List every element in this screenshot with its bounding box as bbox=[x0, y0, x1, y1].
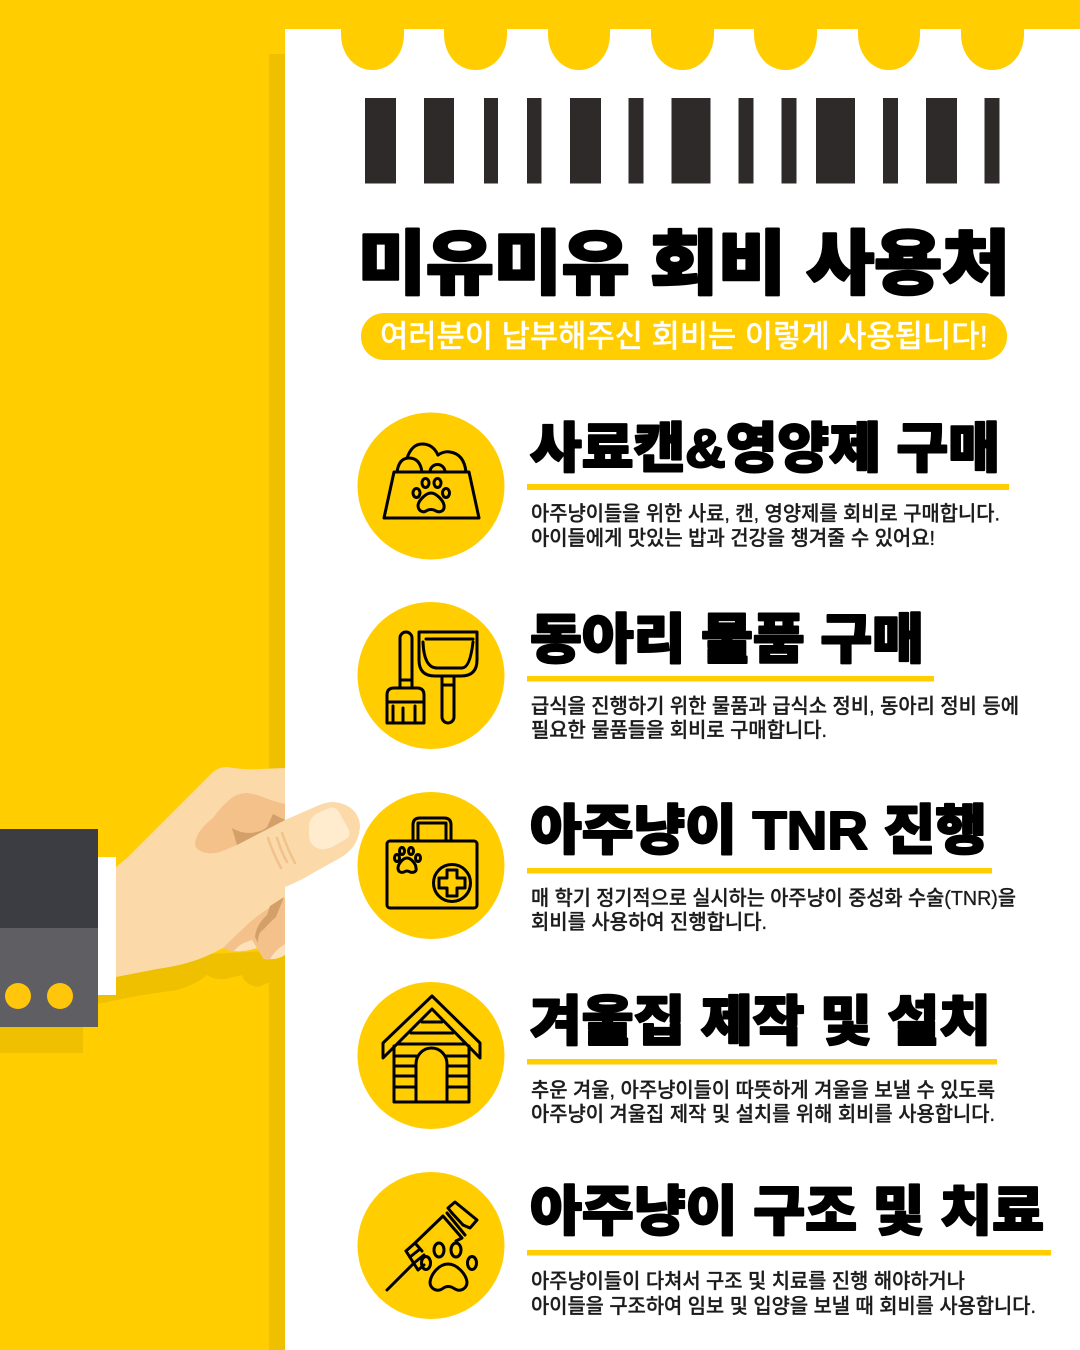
item 1: food and supplements bbox=[358, 412, 1009, 560]
paper panel bbox=[285, 29, 1080, 1350]
buttons bbox=[5, 983, 73, 1009]
shirt cuff bbox=[98, 857, 116, 995]
description: 아주냥이들이 다쳐서 구조 및 치료를 진행 해야하거나 bbox=[531, 1270, 965, 1293]
sleeve bbox=[0, 829, 98, 928]
barcode bbox=[365, 98, 1000, 184]
hand bbox=[116, 767, 360, 977]
item 3: TNR bbox=[358, 792, 1016, 939]
heading: 아주냥이 TNR 진행 bbox=[530, 801, 987, 861]
description bbox=[531, 695, 1019, 742]
description bbox=[531, 1079, 995, 1126]
description: 급식을 진행하기 위한 물품과 급식소 정비, 동아리 정비 등에 bbox=[531, 695, 1019, 718]
item 4: winter shelter bbox=[358, 982, 997, 1129]
heading: 사료캔&영양제 구매 bbox=[530, 419, 1000, 479]
heading: 동아리 물품 구매 bbox=[530, 610, 924, 670]
icon: medical case bbox=[358, 792, 504, 939]
title: 미유미유 회비 사용처 bbox=[358, 225, 1010, 303]
description: 아이들을 구조하여 임보 및 입양을 보낼 때 회비를 사용합니다. bbox=[531, 1295, 1036, 1318]
description: 필요한 물품들을 회비로 구매합니다. bbox=[531, 719, 827, 742]
item 2: club supplies bbox=[358, 602, 1019, 749]
icon: syringe and paw bbox=[358, 1172, 504, 1319]
description: 매 학기 정기적으로 실시하는 아주냥이 중성화 수술(TNR)을 bbox=[531, 887, 1016, 910]
icon: dog house bbox=[358, 982, 504, 1129]
description: 아주냥이 겨울집 제작 및 설치를 위해 회비를 사용합니다. bbox=[531, 1103, 995, 1126]
description: 회비를 사용하여 진행합니다. bbox=[531, 911, 767, 934]
heading: 겨울집 제작 및 설치 bbox=[530, 992, 991, 1052]
item 5: rescue and treatment bbox=[358, 1172, 1051, 1319]
description bbox=[531, 1270, 1036, 1318]
icon: broom and dustpan bbox=[358, 602, 504, 749]
description: 아주냥이들을 위한 사료, 캔, 영양제를 회비로 구매합니다. bbox=[531, 502, 1000, 526]
scalloped awning bbox=[341, 29, 1024, 70]
description bbox=[531, 887, 1016, 934]
description: 아이들에게 맛있는 밥과 건강을 챙겨줄 수 있어요! bbox=[531, 527, 935, 550]
icon: food bowl bbox=[358, 412, 504, 560]
description bbox=[531, 502, 1000, 550]
heading: 아주냥이 구조 및 치료 bbox=[530, 1182, 1044, 1242]
description: 추운 겨울, 아주냥이들이 따뜻하게 겨울을 보낼 수 있도록 bbox=[531, 1079, 995, 1102]
illustration: hand and sleeve bbox=[0, 767, 360, 1053]
subtitle pill: 여러분이 납부해주신 회비는 이렇게 사용됩니다! bbox=[380, 319, 988, 354]
